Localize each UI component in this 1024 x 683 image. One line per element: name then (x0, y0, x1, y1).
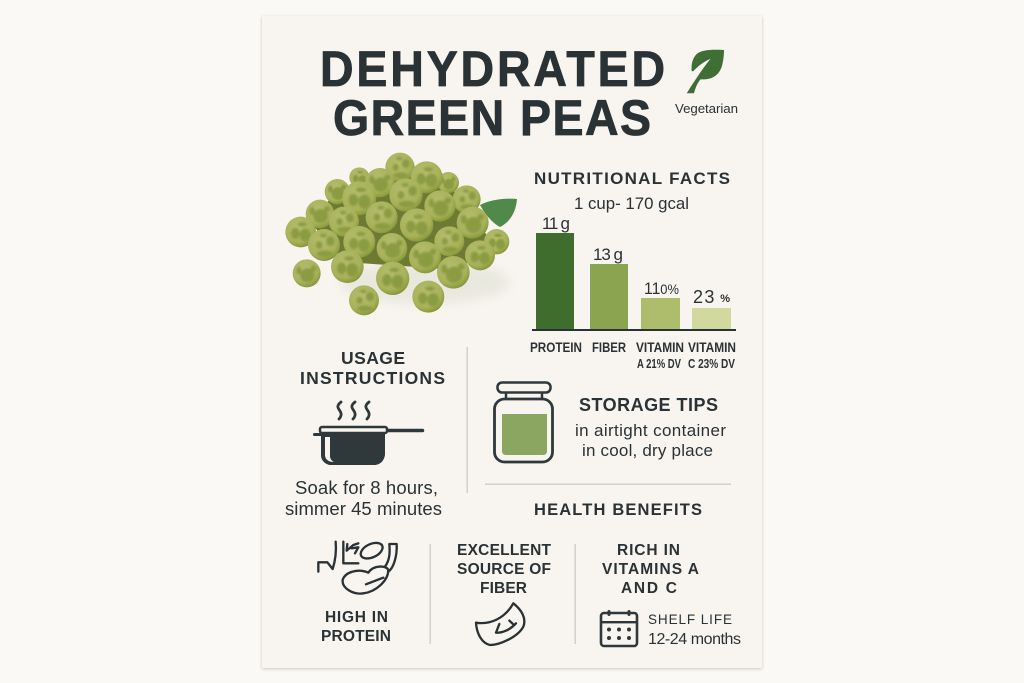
bar chart: VITAMIN (688, 340, 736, 355)
panel: high in protein (318, 540, 397, 645)
label: excellent source of fiber: SOURCE OF (457, 561, 551, 578)
text: shelf life (648, 612, 741, 648)
label: high in protein: PROTEIN (321, 628, 391, 645)
heading: usage instructions: INSTRUCTIONS (300, 368, 445, 388)
text: shelf life: 12-24 months (648, 631, 741, 648)
bar chart: PROTEIN (530, 340, 582, 355)
label: high in protein (321, 609, 391, 645)
text: shelf life: SHELF LIFE (648, 612, 732, 627)
text: storage directions (575, 421, 726, 460)
divider: vertical (466, 347, 468, 493)
label: excellent source of fiber: FIBER (480, 580, 527, 597)
text: usage directions (285, 477, 442, 519)
icon: fiber (476, 603, 524, 645)
label: rich in vitamins a and c: AND C (621, 580, 677, 597)
bar chart: C 23% DV (688, 356, 735, 371)
bar chart: 11 g (542, 214, 570, 233)
bar chart: A 21% DV (637, 356, 681, 371)
panel: card (262, 16, 762, 668)
heading: usage instructions: USAGE (341, 348, 405, 368)
divider: horizontal (485, 484, 731, 485)
icon: vegetarian leaf (687, 50, 724, 93)
label: rich in vitamins a and c: VITAMINS A (602, 561, 699, 578)
panel: nutritional facts (530, 169, 736, 371)
text: usage directions: simmer 45 minutes (285, 498, 442, 519)
title: GREEN PEAS (333, 90, 651, 146)
panel: excellent source of fiber (457, 542, 552, 645)
label: high in protein: HIGH IN (325, 609, 388, 626)
icon: calendar (601, 610, 637, 646)
label: rich in vitamins a and c (602, 542, 699, 597)
bar chart: % (716, 293, 730, 305)
icon: protein (318, 540, 397, 594)
bar chart: 23 (693, 287, 714, 307)
icon: storage jar (494, 382, 552, 462)
text: storage directions: in airtight container (575, 421, 726, 440)
illustration: pile of green peas (285, 153, 517, 315)
heading: storage tips: STORAGE TIPS (579, 395, 718, 415)
bar chart (530, 214, 736, 371)
text: serving size: 1 cup- 170 gcal (574, 195, 689, 213)
panel: usage instructions (285, 348, 445, 519)
label: vegetarian: Vegetarian (675, 101, 738, 116)
title (320, 41, 665, 146)
bar chart: 110% (644, 279, 679, 298)
label: rich in vitamins a and c: RICH IN (617, 542, 680, 559)
heading: usage instructions (300, 348, 445, 388)
icon: steaming pot (314, 402, 422, 465)
heading: health benefits: HEALTH BENEFITS (534, 501, 702, 519)
bar chart: FIBER (592, 340, 626, 355)
text: usage directions: Soak for 8 hours, (295, 477, 438, 498)
divider: bottom right (574, 544, 576, 644)
title: DEHYDRATED (320, 41, 665, 97)
label: excellent source of fiber: EXCELLENT (457, 542, 552, 559)
panel: rich in vitamins (601, 542, 741, 648)
divider: bottom left (430, 544, 431, 644)
heading: nutritional facts: NUTRITIONAL FACTS (534, 169, 730, 188)
label: excellent source of fiber (457, 542, 552, 597)
bar chart: 13 g (593, 245, 623, 264)
text: storage directions: in cool, dry place (582, 441, 713, 460)
bar chart: VITAMIN (636, 340, 684, 355)
panel: storage tips (494, 382, 726, 462)
